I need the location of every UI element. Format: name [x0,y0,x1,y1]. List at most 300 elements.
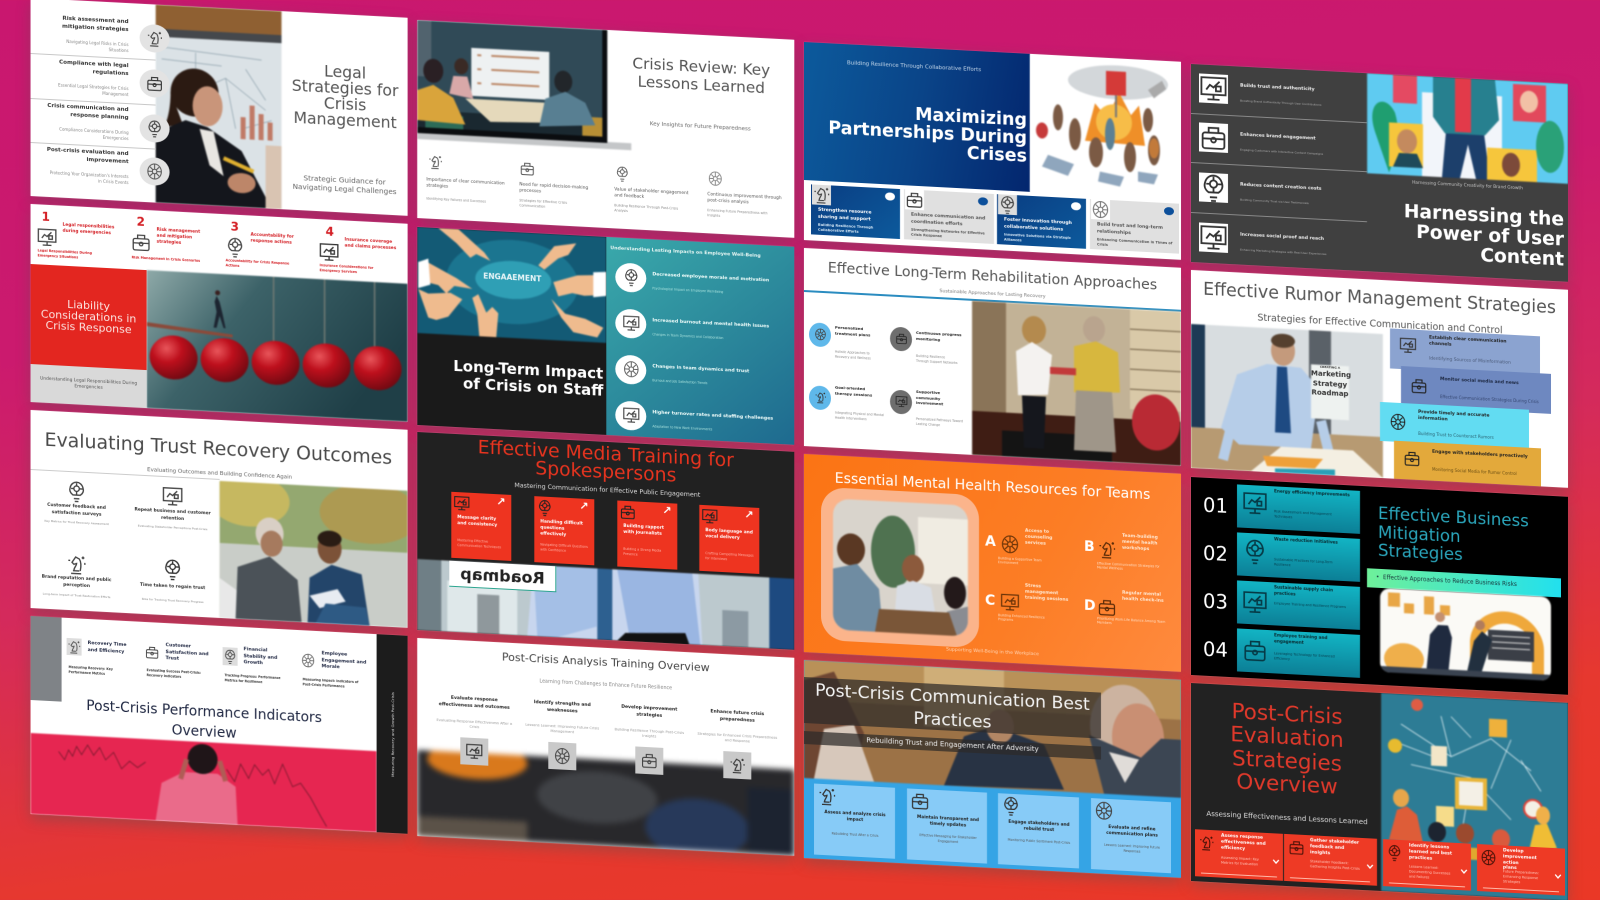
card: develop action plans: Future Preparedness: Enhancing Response Strategies [1503,869,1539,884]
title: Strategies [1378,541,1463,564]
panel: Legal Strategies for Crisis Management [31,0,408,216]
card: difficult questions: effectively [540,531,566,538]
card: strengthen resource: sharing and support [818,214,871,222]
title: Considerations in [41,308,136,326]
card: assess response: Assessing Impact: Key [1221,856,1259,862]
column: improvement [605,698,693,778]
item: crisis communication: Crisis communication and [47,103,129,113]
red title block [31,264,147,370]
row 03: supply chain: 03 [1203,590,1228,614]
item: insurance: Insurance Considerations for [320,263,373,270]
item: compliance: regulations [93,69,129,77]
card: gather feedback: feedback and [1310,844,1344,851]
subtitle: Mastering Communication for Effective Public Engagement [514,482,700,499]
highlight strip: • Effective Approaches to Reduce Business Risks [1376,575,1517,588]
title: Crises [967,144,1027,167]
item B: team-building: Team-building mental health workshops [1122,534,1158,552]
card: maintain updates: Maintain transparent and [917,815,979,823]
title: Liability [67,298,110,313]
item: legal responsibilities: 1 [42,210,50,224]
column: improvement: Insights [642,734,656,739]
photo: two men reviewing papers [218,480,408,628]
card: strengthen resource [811,184,900,239]
item: customer feedback: satisfaction surveys [52,510,101,517]
step box: monitor media: Effective Communication Strategies During Crisis [1440,394,1539,404]
row: burnout: Increased burnout and mental health issues [652,318,769,329]
item: repeat business [134,486,211,531]
card: identify lessons: learned and best [1409,849,1452,857]
item A: counseling: A [985,534,996,550]
panel: Essential Mental Health Resources for Teams [804,454,1181,672]
item: legal responsibilities [38,210,114,260]
item: customer satisfaction [146,642,209,678]
title: Evaluation [1230,722,1344,753]
title: Essential Mental Health Resources for Teams [835,471,1150,503]
row: social proof [1191,213,1367,271]
item: stakeholder feedback [614,166,688,213]
item: legal responsibilities: Legal responsibilities [63,223,114,230]
item: post-crisis evaluation: improvement [87,157,129,165]
row 04: employee training [1191,626,1361,678]
divider rule [31,469,220,480]
item C: stress management: Building Enhanced Resilience Programs [998,613,1045,622]
item: rapid decision-making: Need for rapid decision-making [519,182,588,191]
panel: Crisis Review Key Lessons Learned [417,20,794,238]
item: time taken [140,559,206,604]
card: identify lessons: practices [1409,855,1432,861]
item: accountability: response actions [251,239,292,246]
title: Effective Long-Term Rehabilitation Approaches [828,260,1157,294]
panel: Effective Media Training for Spokespersons [417,432,794,650]
title: Effective Rumor Management Strategies [1203,280,1556,318]
panel: Effective Long-Term Rehabilitation Approaches [804,248,1181,466]
photo: man with roadmap [1191,324,1383,478]
title: Harnessing the [1404,201,1564,231]
title: Effective Media Training for [478,437,734,472]
item: crisis communication: Emergencies [103,135,129,141]
subtitle block: Emergencies [74,384,103,391]
row 01: energy efficiency: Energy efficiency improvements [1274,488,1350,497]
row: team dynamics: Burnout and Job Satisfaction Trends [652,378,707,385]
label: mirrored Roadmap sign [449,561,556,592]
item: rapid decision-making: processes [519,188,541,195]
card: difficult questions: questions [540,525,565,532]
item: brand reputation: perception [63,582,90,589]
card: assess and analyze: impact [847,817,863,823]
column: preparedness [693,702,781,783]
row 03: supply chain: practices [1274,590,1296,596]
title: Evaluating Trust Recovery Outcomes [45,429,392,469]
subtitle: Sustainable Approaches for Lasting Recovery [939,289,1046,300]
subtitle: Strategic Guidance for [303,173,386,187]
item A: counseling: Access to counseling services [1025,529,1052,547]
item: risk management: Risk Management in Crisis Scenarios [132,255,200,263]
card: assess response: Assess response [1221,834,1263,841]
item: risk assessment: Situations [109,47,129,53]
title: Post-Crisis Performance Indicators [86,698,322,726]
row: content costs: Building Community Trust via User Testimonials [1240,198,1309,205]
item: customer satisfaction: Evaluating Success Post-Crisis: Recovery Indicators [147,668,201,678]
column: preparedness: Enhance future crisis [710,709,764,717]
row: team dynamics [615,355,750,385]
item: risk assessment: Navigating Legal Risks in Crisis [66,39,129,47]
list: four legal strategies [30,16,170,186]
item: crisis communication [47,102,170,143]
item: employee engagement [302,650,366,688]
row: brand engagement: Engaging Customers with Interactive Content Campaigns [1240,148,1323,156]
card: difficult questions: ↗ [579,500,589,513]
panel: Post-Crisis Communication Best Practices [804,660,1181,878]
card: rapport: with journalists [623,530,662,537]
title [804,100,1027,166]
item: time taken: Time taken to regain trust [140,583,205,591]
card: difficult questions [534,496,594,565]
item: risk assessment [62,16,170,53]
card: develop action plans: plans [1503,866,1517,871]
item: risk management: 2 [137,215,145,229]
item: legal responsibilities: Legal Responsibilities During [38,248,92,255]
subtitle: Harnessing Community Creativity for Brand Growth [1412,181,1523,191]
row 03: supply chain: Sustainable supply chain [1274,584,1333,592]
card: assess and analyze [814,784,895,859]
item C: stress management: training sessions [1025,596,1068,603]
step box: clear channels: Establish clear communication [1429,335,1507,345]
photo: therapist and patient in gym [972,301,1181,466]
card: engage stakeholders: rebuild trust [1024,827,1054,833]
item: insurance: Insurance coverage [345,237,392,245]
title bar: Practices [913,709,992,733]
title: Effective Business [1378,504,1529,531]
panel: Post-Crisis Evaluation Strategies Overview [1191,683,1568,900]
item B: team-building: B [1084,539,1095,555]
item B: team-building [1083,534,1178,585]
illustration: user content creators [1367,73,1568,184]
item: legal responsibilities: Emergency Situations [38,253,78,260]
item: employee engagement: Measuring Impact: Indicators of Post-Crisis Performance [303,677,358,688]
column: preparedness: Strategies for Enhanced Crisis Preparedness [697,732,777,740]
title: Maximizing [915,105,1027,131]
card: build trust [1090,199,1179,254]
title [1191,698,1383,801]
item: customer feedback: Key Metrics for Trust Recovery Assessment [44,519,109,526]
subtitle: Strategies for Effective Communication and Control [1257,312,1503,336]
card: rapport: Building a Strong Media Presence [623,547,661,557]
row 01: energy efficiency: Risk Assessment and Management Techniques [1274,509,1332,519]
panel: Post-Crisis Performance Indicators Overview [31,616,408,834]
item D: check-ins: Prioritizing Work-Life Balance Among Team Members [1097,616,1165,625]
item: clear communication: Importance of clear communication [426,177,505,187]
card: body language [699,505,759,574]
item D: check-ins [1083,589,1178,640]
row 02: waste reduction: Waste reduction initiatives [1274,536,1338,545]
card: enhance communication: coordination efforts [911,219,963,227]
item: continuous monitoring: Building Resilience Through Support Networks [916,354,958,365]
item: time taken: Role for Tracking Trust Recovery Progress [142,597,204,604]
card: message clarity: Mastering Effective Communication Techniques [457,538,501,549]
title: Long-Term Impact [453,357,603,383]
row: social proof: Enhancing Marketing Strategies with Real User Experiences [1240,248,1326,256]
title: Legal Strategies for Crisis Management [292,61,398,132]
row: social proof: Increases social proof and reach [1240,233,1324,242]
label: ENGAGEMENT cloud text: ENGAAEMENT [483,271,541,284]
item: financial stability: Tracking Progress: Performance Metrics for Resilience [225,673,281,684]
item: personalized treatment: Personalized [835,325,863,331]
card: assess and analyze: Rebuilding Trust After a Crisis [832,831,878,838]
item: goal oriented: Goal-oriented [835,385,865,391]
title [86,698,322,741]
item: goal oriented [809,383,887,431]
step box: stakeholders [1394,441,1541,486]
row: content costs: Reduces content creation costs [1240,183,1321,192]
item: community involvement: Personalized Pathways Toward Lasting Change [916,417,963,427]
card: body language: ↗ [744,508,754,522]
photo: business discussion [804,660,1181,798]
item: stakeholder feedback: Value of stakeholder engagement [614,187,688,196]
panel: Evaluating Trust Recovery Outcomes [31,410,408,628]
accent rule [804,290,1181,311]
card: gather feedback: Stakeholder Feedback: Gathering Insights Post-Crisis [1310,859,1360,871]
column: strengths: weaknesses [547,707,578,714]
title [1378,505,1566,570]
photo: team meeting [833,499,968,637]
item: post-crisis evaluation [47,146,170,186]
card: enhance communication [904,189,994,244]
panel: Post-Crisis Analysis Training Overview [417,638,794,856]
row 02: waste reduction: 02 [1203,542,1228,566]
row 02: waste reduction: Sustainable Practices for Long-Term Resilience [1274,557,1333,567]
title: Crisis Response [46,319,132,336]
item: risk management: strategies [157,240,181,246]
item A: counseling: Building a Supportive Team Environment [998,556,1042,565]
item: clear communication: strategies [426,183,448,190]
item: financial stability: Financial Stability and Growth [244,647,277,666]
title: Partnerships During [828,118,1027,149]
card: gather feedback: insights [1310,850,1330,856]
panel: Harnessing the Power of User Content [1191,64,1568,282]
subtitle: Evaluating Outcomes and Building Confidence Again [147,467,292,481]
item: compliance: Compliance with legal [59,59,129,69]
item: continuous improvement: Continuous improvement through [707,192,782,201]
item: stakeholder feedback: and feedback [614,193,644,200]
item: brand reputation: Brand reputation and public [42,575,112,583]
title: Power of User [1416,222,1564,251]
highlight strip [1367,568,1561,597]
panel: Liability Considerations in Crisis Response [31,204,408,422]
item: continuous improvement: post-crisis analysis [707,198,749,205]
row 04: employee training: Leveraging Technology for Enhanced Efficiency [1274,651,1335,661]
item: risk management [132,215,200,263]
item: risk assessment: Risk assessment and [62,16,129,25]
item: recovery time: Measuring Recovery: Key Performance Metrics [69,665,113,675]
item: clear communication [426,156,505,204]
step box: monitor media [1401,366,1551,414]
card: body language: Crafting Compelling Messages for Interviews [705,551,754,561]
column: strengths [525,700,599,770]
title: Crisis Review: Key Lessons Learned [632,54,770,97]
item: post-crisis evaluation: Post-crisis evaluation and [47,147,129,157]
illustration: PR crisis scene [1030,54,1181,200]
item: continuous monitoring: Continuous progress [916,330,962,337]
item: post-crisis evaluation: Protecting Your Organization's Interests [50,170,129,179]
card: message clarity: ↗ [496,495,506,509]
title: of Crisis on Staff [463,374,603,400]
item: insurance [320,224,396,274]
card: enhance communication: Enhance communication and [911,213,985,222]
card: assess response: Metrics for Evaluation [1221,860,1258,866]
item: accountability: 3 [231,220,239,234]
row: turnover: Higher turnover rates and staffing challenges [652,410,773,422]
row 04: employee training: 04 [1203,638,1228,662]
column: strengths: Management [550,729,574,734]
column: strengths: Identify strengths and [534,700,591,708]
item D: check-ins: Regular mental health check-ins [1122,591,1164,604]
row: brand engagement: Enhances brand engagement [1240,133,1316,142]
subtitle: Assessing Effectiveness and Lessons Learned [1206,809,1368,826]
panel: Maximizing Partnerships During Crises [804,42,1181,260]
item C: stress management: Stress [1025,584,1041,589]
step box: clear channels: channels [1429,341,1452,347]
label: Marketing Strategy Roadmap sign: CREATING A [1320,365,1340,370]
step box: timely information [1380,402,1529,449]
row: morale: Decreased employee morale and motivation [652,272,769,283]
card: foster innovation: Foster innovation through [1004,218,1072,226]
row: builds trust: Builds trust and authenticity [1240,84,1315,92]
title: Mitigation [1378,522,1461,546]
subtitle block [31,364,147,408]
row 01: energy efficiency [1191,482,1361,534]
item: accountability: Accountability for Crisis Response [226,258,289,266]
column: improvement: strategies [636,712,662,718]
item: crisis communication: response planning [70,112,129,121]
column: strengths: Lessons Learned: Improving Future Crisis [525,723,599,731]
panel: Effective Rumor Management Strategies [1191,270,1568,488]
subtitle: Building Resilience Through Collaborative Efforts [847,60,981,73]
title: Overview [172,722,237,741]
right content panel [606,237,794,445]
card: identify lessons [1383,839,1471,891]
column: improvement: Develop improvement [621,705,677,713]
title bar [804,677,1101,739]
title [453,357,604,400]
vertical caption: Measuring Recovery and Growth Post-Crisis [390,692,395,777]
card: body language: Body language and [705,528,753,536]
photo: red pendulum spheres [146,269,408,422]
step box: stakeholders: Engage with stakeholders proactively [1432,450,1528,460]
row: morale [615,263,769,294]
row 04: employee training: Employee training and [1274,632,1327,640]
card: maintain updates: timely updates [930,822,966,829]
card: build trust: Enhancing Communication in Times of Crisis [1097,237,1172,247]
row: burnout: Changes in Team Dynamics and Collaboration [652,332,723,340]
card: maintain updates [907,788,987,864]
item: community involvement: Supportive [916,389,940,395]
column: preparedness: and Response [725,738,750,743]
card: engage stakeholders [998,793,1079,868]
step box: timely information: Provide timely and accurate [1418,410,1489,419]
title: Post-Crisis [1232,699,1342,730]
item: continuous improvement: Enhancing Future Preparedness with Insights [707,208,768,218]
card: difficult questions: Navigating Difficult Questions with Confidence [540,542,588,553]
item: legal responsibilities: during emergencies [63,229,111,236]
item: rapid decision-making [519,162,588,209]
card: evaluate and refine: Lessons Learned: Improving Future Responses [1104,843,1160,854]
card: rapport: Building rapport [623,524,664,531]
item C: stress management: C [985,593,995,609]
card: identify lessons: Identify lessons [1409,843,1449,851]
card: assess response: efficiency [1221,845,1245,851]
label: mirrored Roadmap sign: Roadmap [460,564,545,588]
row: content costs [1191,163,1367,222]
column: evaluate response: Crisis [469,725,479,729]
illustration: hands around engagement cloud [417,227,606,344]
row 01: energy efficiency: 01 [1203,494,1228,518]
subtitle bar [804,731,1101,760]
item: repeat business: Repeat business and customer [134,507,211,516]
step box: clear channels [1390,328,1540,376]
title bar: Post-Crisis Communication Best [815,681,1090,715]
item: repeat business: Evaluating Stakeholder Perceptions Post-Crisis [138,524,207,531]
card: develop action plans: improvement action [1503,854,1537,866]
subtitle: Learning from Challenges to Enhance Future Resilience [540,679,672,691]
photo: blurred meeting background [417,746,794,856]
row: burnout [615,309,770,340]
blue title block [804,42,1030,192]
column: evaluate response: Evaluating Response Effectiveness After a [436,718,512,726]
card: evaluate and refine: communication plans [1106,831,1158,839]
title: Strategies [1232,746,1342,777]
row: turnover [615,401,774,431]
item: brand reputation: Long-term Impact of Trust Restoration Efforts [43,592,110,599]
item: risk assessment: mitigation strategies [62,24,129,33]
column: preparedness: preparedness [720,716,755,723]
title [41,298,136,336]
card: foster innovation [997,194,1086,249]
illustration: business analysis [1380,588,1551,681]
card: build trust: Build trust and long-term [1097,222,1163,231]
item A: counseling [984,528,1079,579]
card: develop action plans [1477,844,1565,896]
item: crisis communication: Compliance Considerations During [59,127,129,135]
column: evaluate response: effectiveness and outcomes [439,702,510,710]
photo: lawyer at whiteboard [154,4,283,210]
card: message clarity: Message clarity [457,515,496,522]
item: community involvement [890,388,968,436]
title: Spokespersons [535,458,676,486]
photo: man in blue shirt at table [417,558,794,650]
footer caption: Supporting Well-Being in the Workplace [946,647,1039,657]
item C: stress management: management [1025,590,1058,596]
column: evaluate response: Evaluate response [451,696,498,703]
step box: timely information: information [1418,415,1448,422]
item: goal oriented: therapy sessions [835,390,872,397]
item: recovery time [66,638,126,675]
item: continuous monitoring [890,325,968,369]
illustration: team with connected data [1381,693,1568,900]
card: develop action plans: Develop [1503,848,1524,854]
title: Content [1480,245,1564,271]
item D: check-ins: D [1084,598,1096,614]
subtitle: Navigating Legal Challenges [293,182,397,196]
card: rapport [617,500,677,570]
card: gather feedback: Gather stakeholder [1310,838,1359,846]
card: gather feedback [1284,834,1377,886]
card: engage stakeholders: Monitoring Public Sentiment Post-Crisis [1008,838,1070,845]
label: Marketing Strategy Roadmap sign: Marketing Strategy Roadmap [1311,369,1351,398]
card: body language: vocal delivery [705,534,740,541]
item: personalized treatment: treatment plans [835,330,870,337]
row: brand engagement [1191,113,1367,172]
subtitle [293,173,397,196]
